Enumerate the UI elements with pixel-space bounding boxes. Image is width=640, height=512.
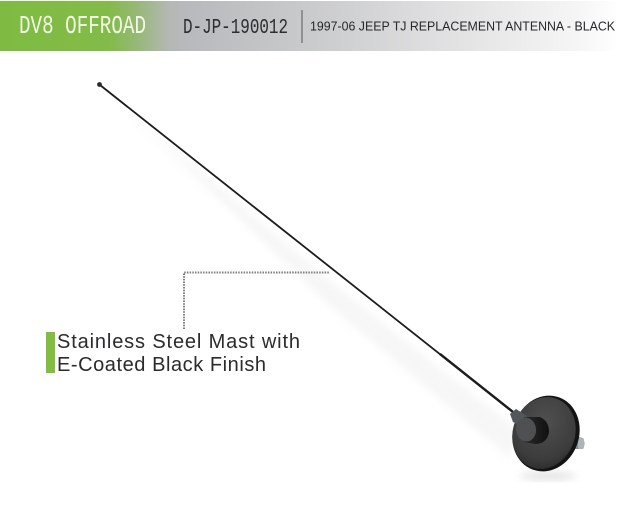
antenna illustration [97,82,590,481]
part number: D-JP-190012 [183,17,288,40]
dotted leader line [184,272,329,329]
brand name: DV8 OFFROAD [19,11,146,41]
mount disc [502,386,590,481]
callout accent bar [46,332,55,373]
mast ferrule [510,409,527,426]
mount bolt [574,436,584,449]
antenna mast [100,85,513,412]
callout text: Stainless Steel Mast with [57,331,300,353]
product title: 1997-06 JEEP TJ REPLACEMENT ANTENNA - BLACK [310,18,615,34]
header divider [301,10,303,43]
mount cap [514,416,549,444]
callout text: E-Coated Black Finish [57,354,266,376]
antenna shadow [125,108,520,458]
callout [46,331,306,376]
header banner [0,1,640,51]
mast tip [97,82,102,87]
